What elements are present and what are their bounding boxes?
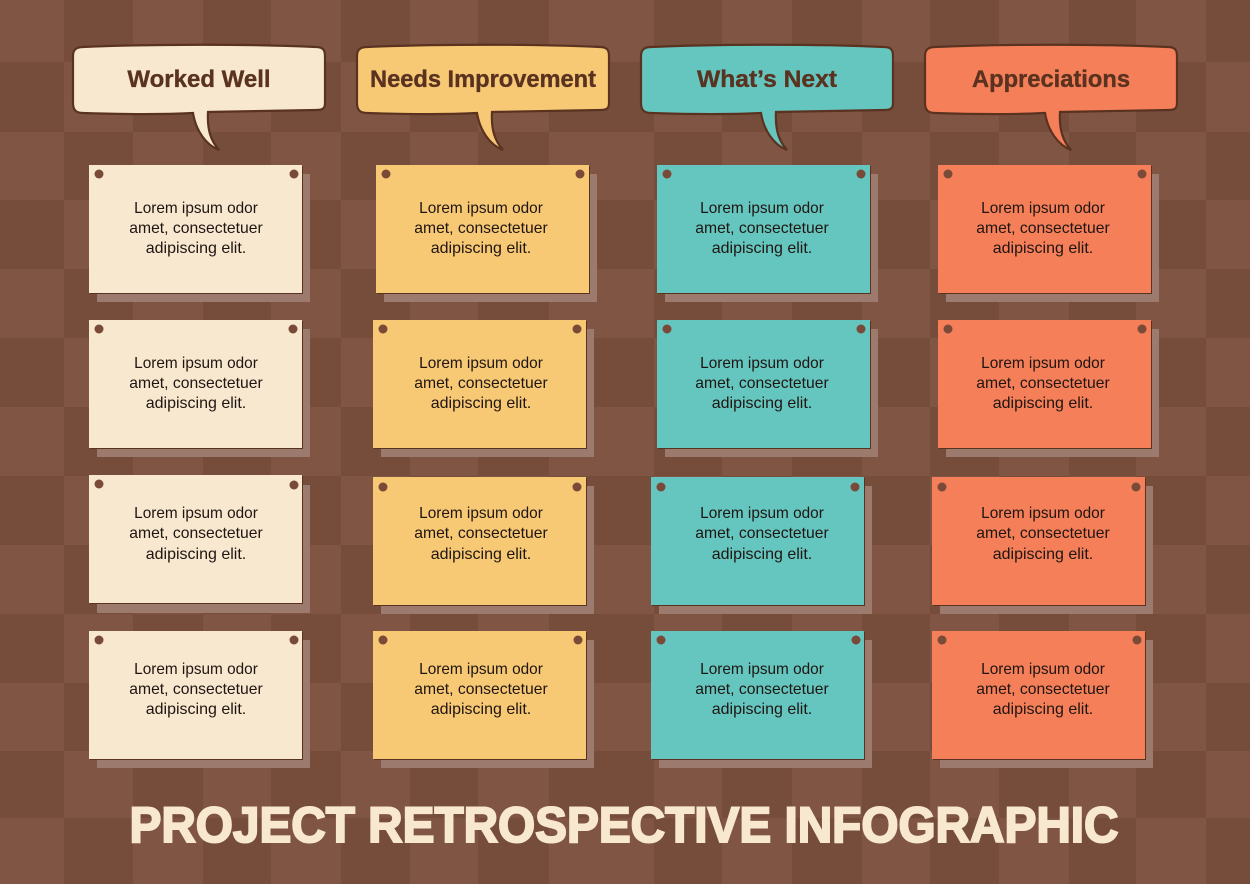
note 3-1: Lorem ipsum odor [700, 200, 824, 217]
note 2-3: adipiscing elit. [431, 546, 531, 563]
speech bubble: Needs Improvement [357, 45, 609, 150]
note 3-3 [651, 477, 872, 614]
note 2-4 [373, 631, 594, 768]
note 4-1: amet, consectetuer [976, 220, 1110, 237]
note 1-4 [89, 631, 310, 768]
column 3 notes: What's Next [651, 165, 878, 768]
speech bubble: Appreciations: Appreciations [972, 66, 1130, 93]
note 2-2: amet, consectetuer [414, 375, 548, 392]
note 3-3: Lorem ipsum odor [700, 505, 824, 522]
note 3-3: adipiscing elit. [712, 546, 812, 563]
note 2-1 [376, 165, 597, 302]
column 4 notes: Appreciations [932, 165, 1159, 768]
column 2 notes: Needs Improvement [373, 165, 597, 768]
note 4-4: amet, consectetuer [976, 681, 1110, 698]
speech bubble: Needs Improvement: Needs Improvement [370, 66, 596, 93]
note 1-4: adipiscing elit. [146, 701, 246, 718]
note 2-2: adipiscing elit. [431, 395, 531, 412]
speech bubble: Worked Well [73, 45, 325, 150]
note 3-2: amet, consectetuer [695, 375, 829, 392]
note 1-3: Lorem ipsum odor [134, 505, 258, 522]
note 1-1: Lorem ipsum odor [134, 200, 258, 217]
title: PROJECT RETROSPECTIVE INFOGRAPHIC [130, 797, 1118, 853]
note 3-1: amet, consectetuer [695, 220, 829, 237]
note 4-4: Lorem ipsum odor [981, 661, 1105, 678]
note 1-2: Lorem ipsum odor [134, 355, 258, 372]
note 4-2 [938, 320, 1159, 457]
note 3-1 [657, 165, 878, 302]
column 1 notes: Worked Well [89, 165, 310, 768]
note 2-3: Lorem ipsum odor [419, 505, 543, 522]
note 4-3 [932, 477, 1153, 614]
note 1-3: adipiscing elit. [146, 546, 246, 563]
note 3-1: adipiscing elit. [712, 240, 812, 257]
note 4-1: Lorem ipsum odor [981, 200, 1105, 217]
note 1-2: adipiscing elit. [146, 395, 246, 412]
note 2-3: amet, consectetuer [414, 525, 548, 542]
note 4-1: adipiscing elit. [993, 240, 1093, 257]
note 4-4: adipiscing elit. [993, 701, 1093, 718]
note 4-2: Lorem ipsum odor [981, 355, 1105, 372]
note 1-4: Lorem ipsum odor [134, 661, 258, 678]
note 3-3: amet, consectetuer [695, 525, 829, 542]
note 3-2 [657, 320, 878, 457]
note 4-2: adipiscing elit. [993, 395, 1093, 412]
speech bubble: What's Next [641, 45, 893, 150]
speech bubble: Worked Well: Worked Well [127, 66, 271, 93]
note 2-2: Lorem ipsum odor [419, 355, 543, 372]
note 2-1: amet, consectetuer [414, 220, 548, 237]
note 2-4: amet, consectetuer [414, 681, 548, 698]
note 2-4: Lorem ipsum odor [419, 661, 543, 678]
note 3-2: Lorem ipsum odor [700, 355, 824, 372]
note 4-3: Lorem ipsum odor [981, 505, 1105, 522]
note 2-3 [373, 477, 594, 614]
note 1-2 [89, 320, 310, 457]
note 3-2: adipiscing elit. [712, 395, 812, 412]
note 3-4: adipiscing elit. [712, 701, 812, 718]
note 1-2: amet, consectetuer [129, 375, 263, 392]
note 4-3: amet, consectetuer [976, 525, 1110, 542]
speech bubble: What's Next: What’s Next [697, 66, 837, 93]
note 1-4: amet, consectetuer [129, 681, 263, 698]
note 2-4: adipiscing elit. [431, 701, 531, 718]
note 2-1: adipiscing elit. [431, 240, 531, 257]
note 4-1 [938, 165, 1159, 302]
note 2-1: Lorem ipsum odor [419, 200, 543, 217]
note 1-3 [89, 475, 310, 613]
note 4-3: adipiscing elit. [993, 546, 1093, 563]
note 2-2 [373, 320, 594, 457]
note 3-4: amet, consectetuer [695, 681, 829, 698]
speech bubble: Appreciations [925, 45, 1177, 150]
note 1-3: amet, consectetuer [129, 525, 263, 542]
note 3-4: Lorem ipsum odor [700, 661, 824, 678]
note 4-2: amet, consectetuer [976, 375, 1110, 392]
note 1-1: adipiscing elit. [146, 240, 246, 257]
note 1-1: amet, consectetuer [129, 220, 263, 237]
note 4-4 [932, 631, 1153, 768]
note 3-4 [651, 631, 872, 768]
note 1-1 [89, 165, 310, 302]
